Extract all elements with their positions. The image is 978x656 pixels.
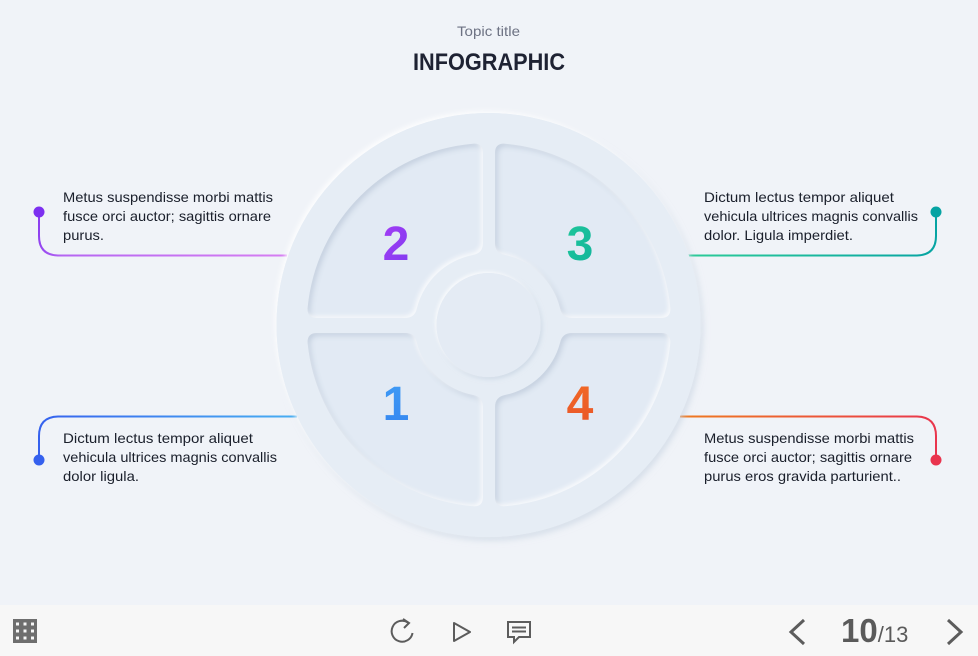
number 1: 1 — [383, 378, 409, 431]
text block: item 3: dolor. Ligula imperdiet. — [704, 227, 853, 243]
text block: item 3: Dictum lectus tempor aliquet — [704, 189, 894, 205]
text block: item 3: vehicula ultrices magnis convallis — [704, 208, 918, 224]
quadrant 4 — [495, 333, 670, 506]
number 2: 2 — [383, 218, 409, 271]
header: topic title and heading — [413, 23, 565, 76]
text block: item 4: fusce orci auctor; sagittis ornare — [704, 449, 912, 465]
page counter: 10/13 — [841, 612, 908, 649]
connector: item 2 — [34, 206, 287, 256]
number 4: 4 — [567, 378, 594, 431]
footer toolbar — [0, 605, 978, 656]
text block: item 2: Metus suspendisse morbi mattis — [63, 189, 273, 205]
heading: INFOGRAPHIC — [413, 49, 565, 76]
text block: item 2: fusce orci auctor; sagittis ornare — [63, 208, 271, 224]
text block: item 2: purus. — [63, 227, 104, 243]
icon: comment — [508, 622, 530, 642]
text block: item 1: dolor ligula. — [63, 468, 139, 484]
text block: item 1 — [63, 430, 277, 484]
icon: replay — [392, 619, 412, 642]
icon: previous arrow — [791, 620, 804, 644]
text block: item 4: purus eros gravida parturient.. — [704, 468, 901, 484]
text block: item 4: Metus suspendisse morbi mattis — [704, 430, 914, 446]
quadrants — [308, 144, 670, 506]
text block: item 2 — [63, 189, 273, 243]
quadrant 1 — [308, 333, 483, 506]
text block: item 4 — [704, 430, 914, 484]
number 3: 3 — [567, 218, 593, 271]
quadrant 3 — [495, 144, 670, 318]
icon: menu grid — [13, 619, 37, 643]
text block: item 1: vehicula ultrices magnis convallis — [63, 449, 277, 465]
icon: next arrow — [948, 620, 961, 644]
outer disc — [276, 113, 700, 537]
icon: play — [454, 623, 470, 641]
connector: item 3 — [688, 206, 942, 256]
quadrant 2 — [308, 144, 483, 318]
centre circle — [436, 273, 540, 377]
text block: item 3 — [704, 189, 918, 243]
connector: item 1 — [34, 416, 297, 466]
circular diagram — [276, 113, 700, 537]
connector: item 4 — [680, 416, 942, 466]
text block: item 1: Dictum lectus tempor aliquet — [63, 430, 253, 446]
topic title: Topic title — [457, 23, 520, 39]
